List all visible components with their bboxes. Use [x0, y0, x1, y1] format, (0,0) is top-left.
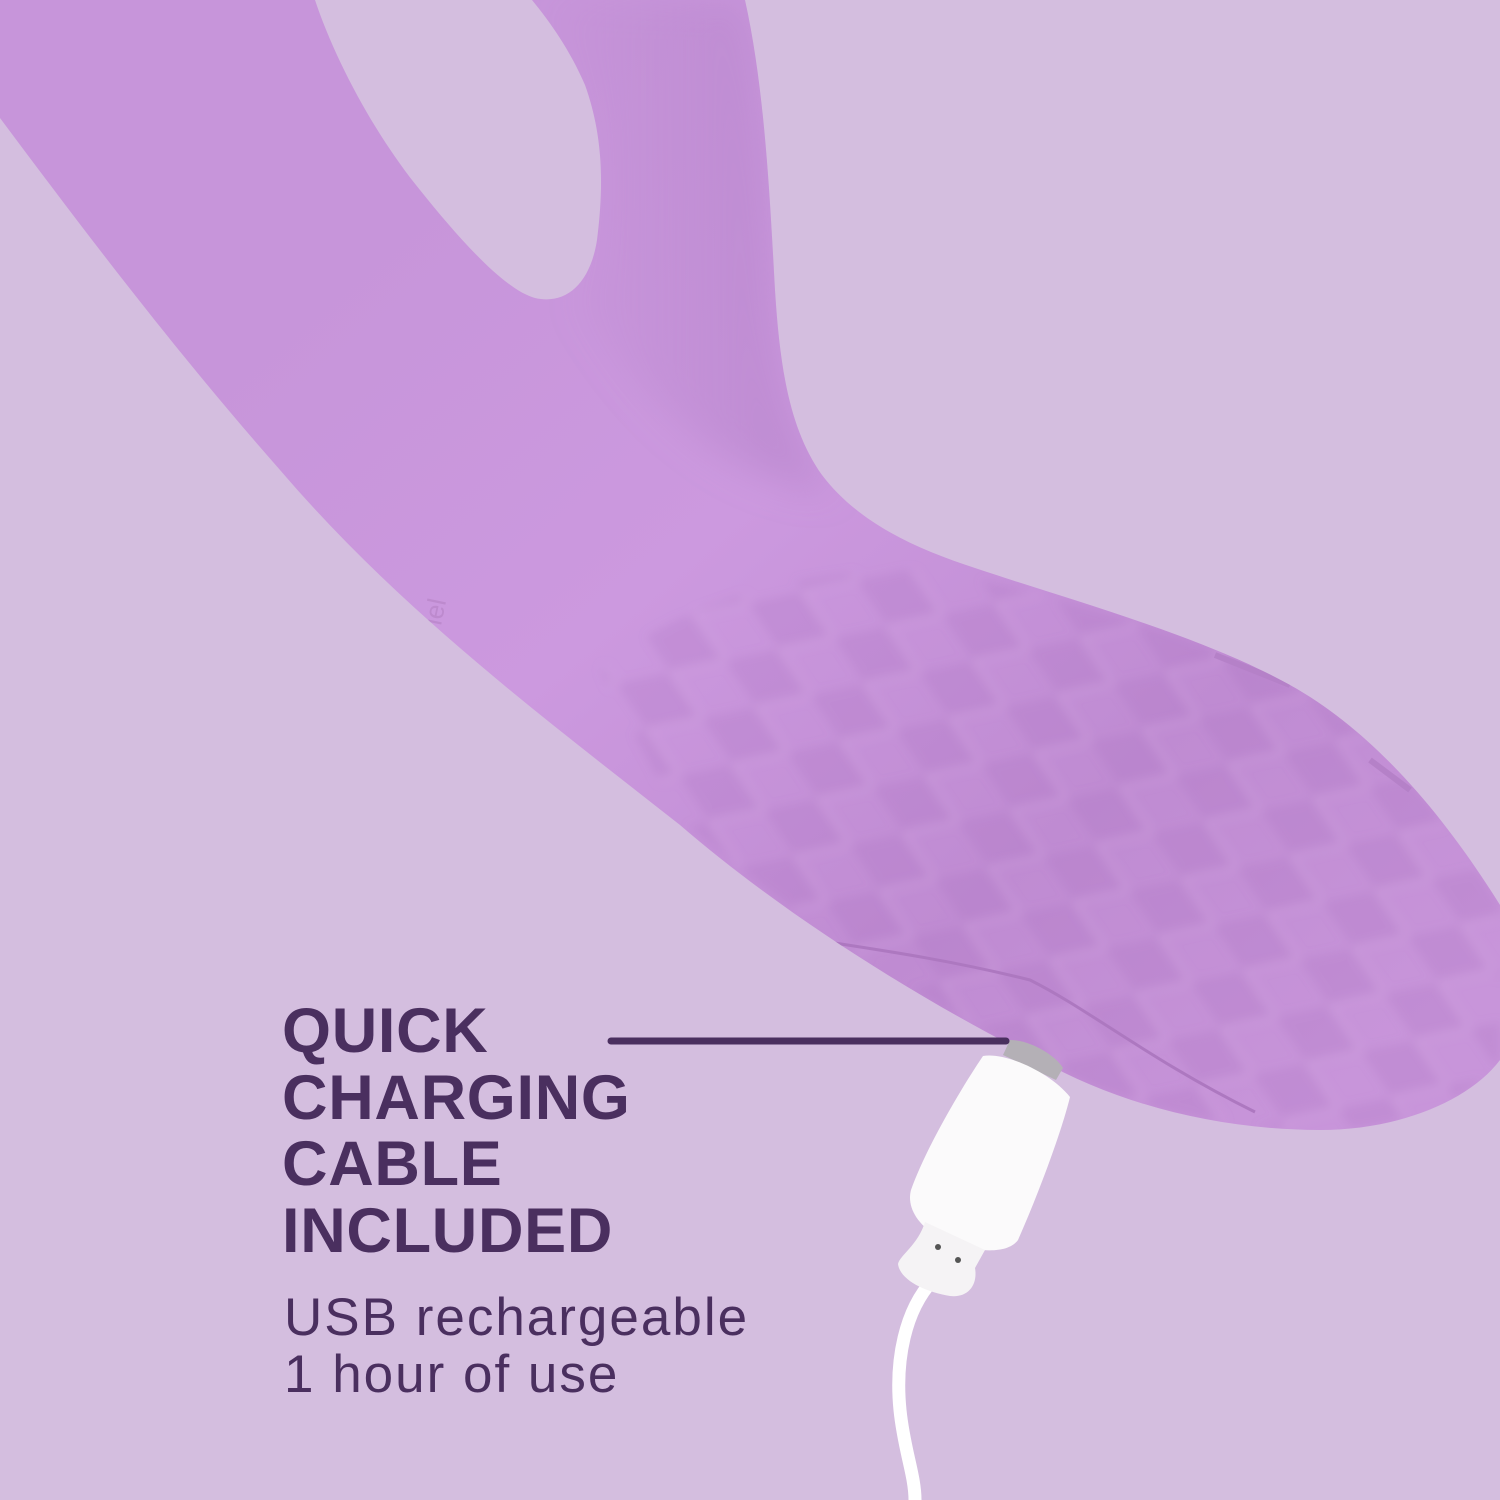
description: USB rechargeable [284, 1288, 749, 1347]
charging cable [898, 1040, 1070, 1500]
right arm shading [704, 88, 803, 473]
textured surface [632, 602, 1471, 1112]
heading: CABLE [282, 1129, 502, 1199]
connector housing [910, 1055, 1070, 1250]
callout line [611, 1038, 1006, 1044]
cable wire [899, 1280, 933, 1500]
heading [282, 996, 631, 1266]
side ridge [1215, 655, 1410, 790]
strain relief [898, 1222, 985, 1296]
metal connector tip [1003, 1040, 1063, 1080]
embossed mark: iel [417, 596, 452, 627]
heading: QUICK [282, 996, 488, 1066]
description: 1 hour of use [284, 1345, 619, 1404]
description [284, 1288, 749, 1404]
seam line [815, 940, 1255, 1112]
heading: INCLUDED [282, 1196, 613, 1266]
heading: CHARGING [282, 1062, 631, 1132]
product body [0, 0, 1500, 1130]
